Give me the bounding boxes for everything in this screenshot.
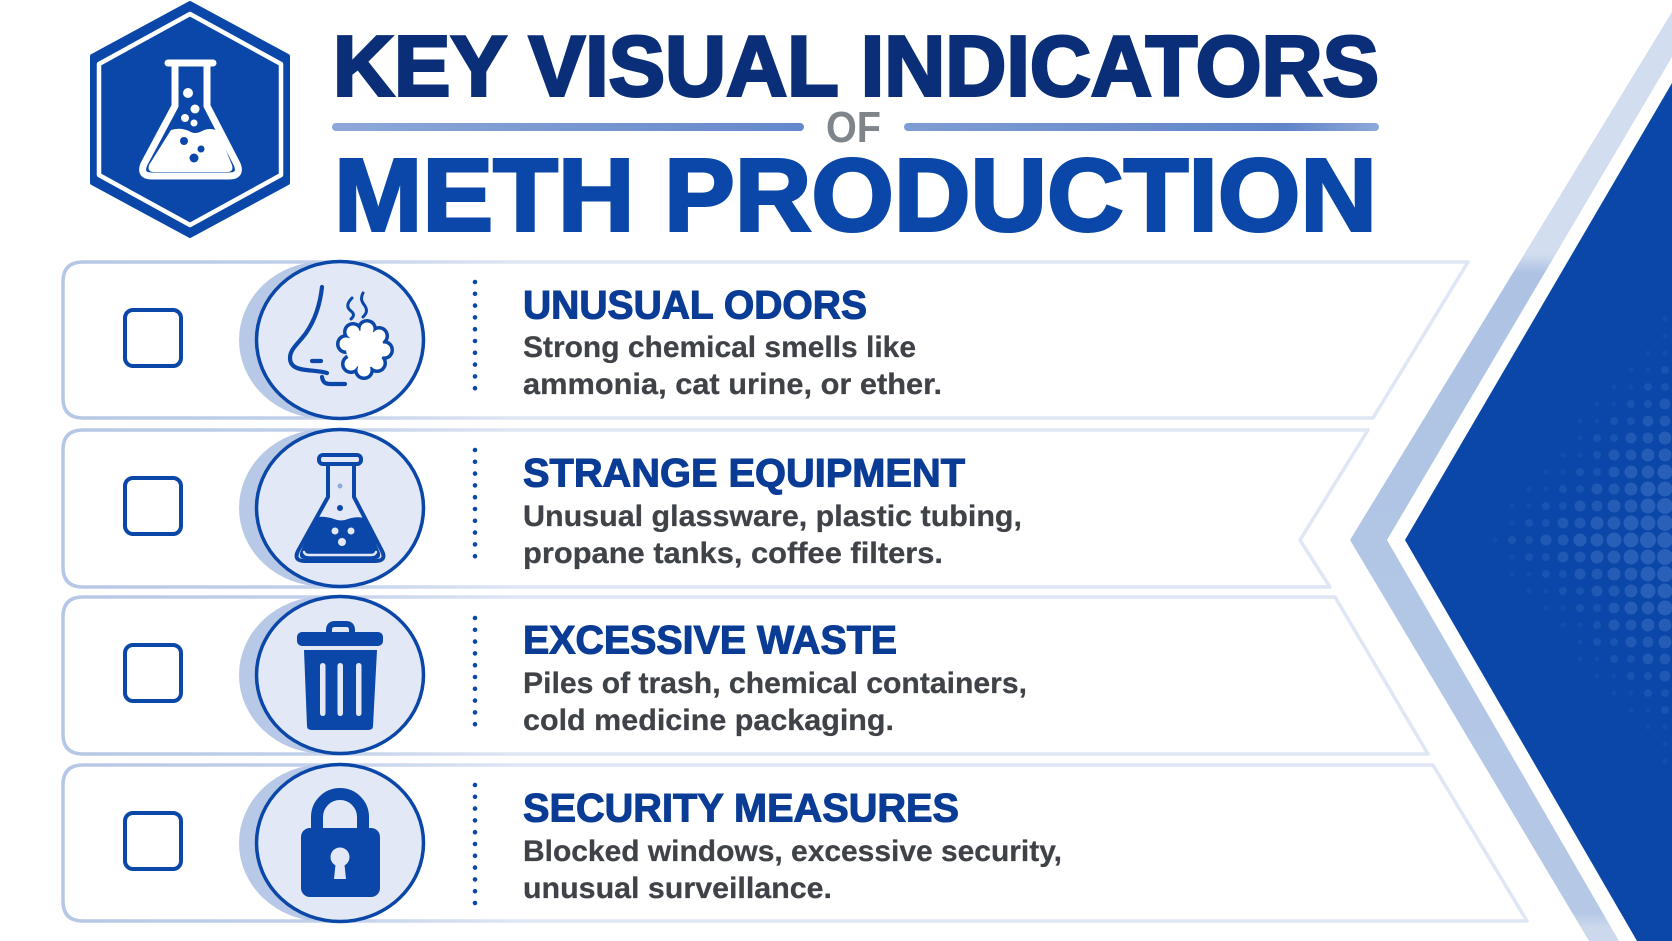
dotted divider xyxy=(473,618,477,736)
description: Blocked windows, excessive security, xyxy=(523,835,1062,868)
heading: EXCESSIVE WASTE xyxy=(523,618,897,662)
description xyxy=(523,331,942,401)
icon: nose and smell cloud xyxy=(239,262,424,418)
description: Unusual glassware, plastic tubing, xyxy=(523,500,1022,533)
description: propane tanks, coffee filters. xyxy=(523,537,943,570)
icon: padlock xyxy=(239,764,424,922)
logo: hexagon flask badge xyxy=(92,3,288,236)
panel: strange equipment xyxy=(63,430,1368,587)
panel: excessive waste xyxy=(63,596,1428,754)
title rule left xyxy=(332,123,804,131)
heading: UNUSUAL ODORS xyxy=(523,284,867,328)
title line 2: METH PRODUCTION xyxy=(334,138,1377,252)
description xyxy=(523,835,1062,905)
icon: flask xyxy=(239,430,424,586)
dotted divider xyxy=(473,450,477,568)
checkbox xyxy=(125,310,181,366)
chevron: light band xyxy=(1350,12,1672,941)
checkbox xyxy=(125,478,181,534)
title line 1: KEY VISUAL INDICATORS xyxy=(333,20,1379,114)
description: Strong chemical smells like xyxy=(523,331,916,364)
panel: unusual odors xyxy=(63,262,1468,418)
title rule right xyxy=(904,123,1379,131)
checkbox xyxy=(125,645,181,701)
description: cold medicine packaging. xyxy=(523,704,894,737)
description: ammonia, cat urine, or ether. xyxy=(523,368,942,401)
icon: trash can xyxy=(239,596,424,754)
description: Piles of trash, chemical containers, xyxy=(523,667,1027,700)
title connector: OF: OF xyxy=(826,103,881,152)
chevron: dark blue panel with halftone xyxy=(1405,83,1672,941)
description xyxy=(523,500,1022,570)
heading: STRANGE EQUIPMENT xyxy=(523,452,965,496)
dotted divider xyxy=(473,785,477,903)
dotted divider xyxy=(473,282,477,400)
panel: security measures xyxy=(63,764,1527,922)
heading: SECURITY MEASURES xyxy=(523,786,959,830)
description: unusual surveillance. xyxy=(523,872,832,905)
checkbox xyxy=(125,813,181,869)
description xyxy=(523,667,1027,737)
